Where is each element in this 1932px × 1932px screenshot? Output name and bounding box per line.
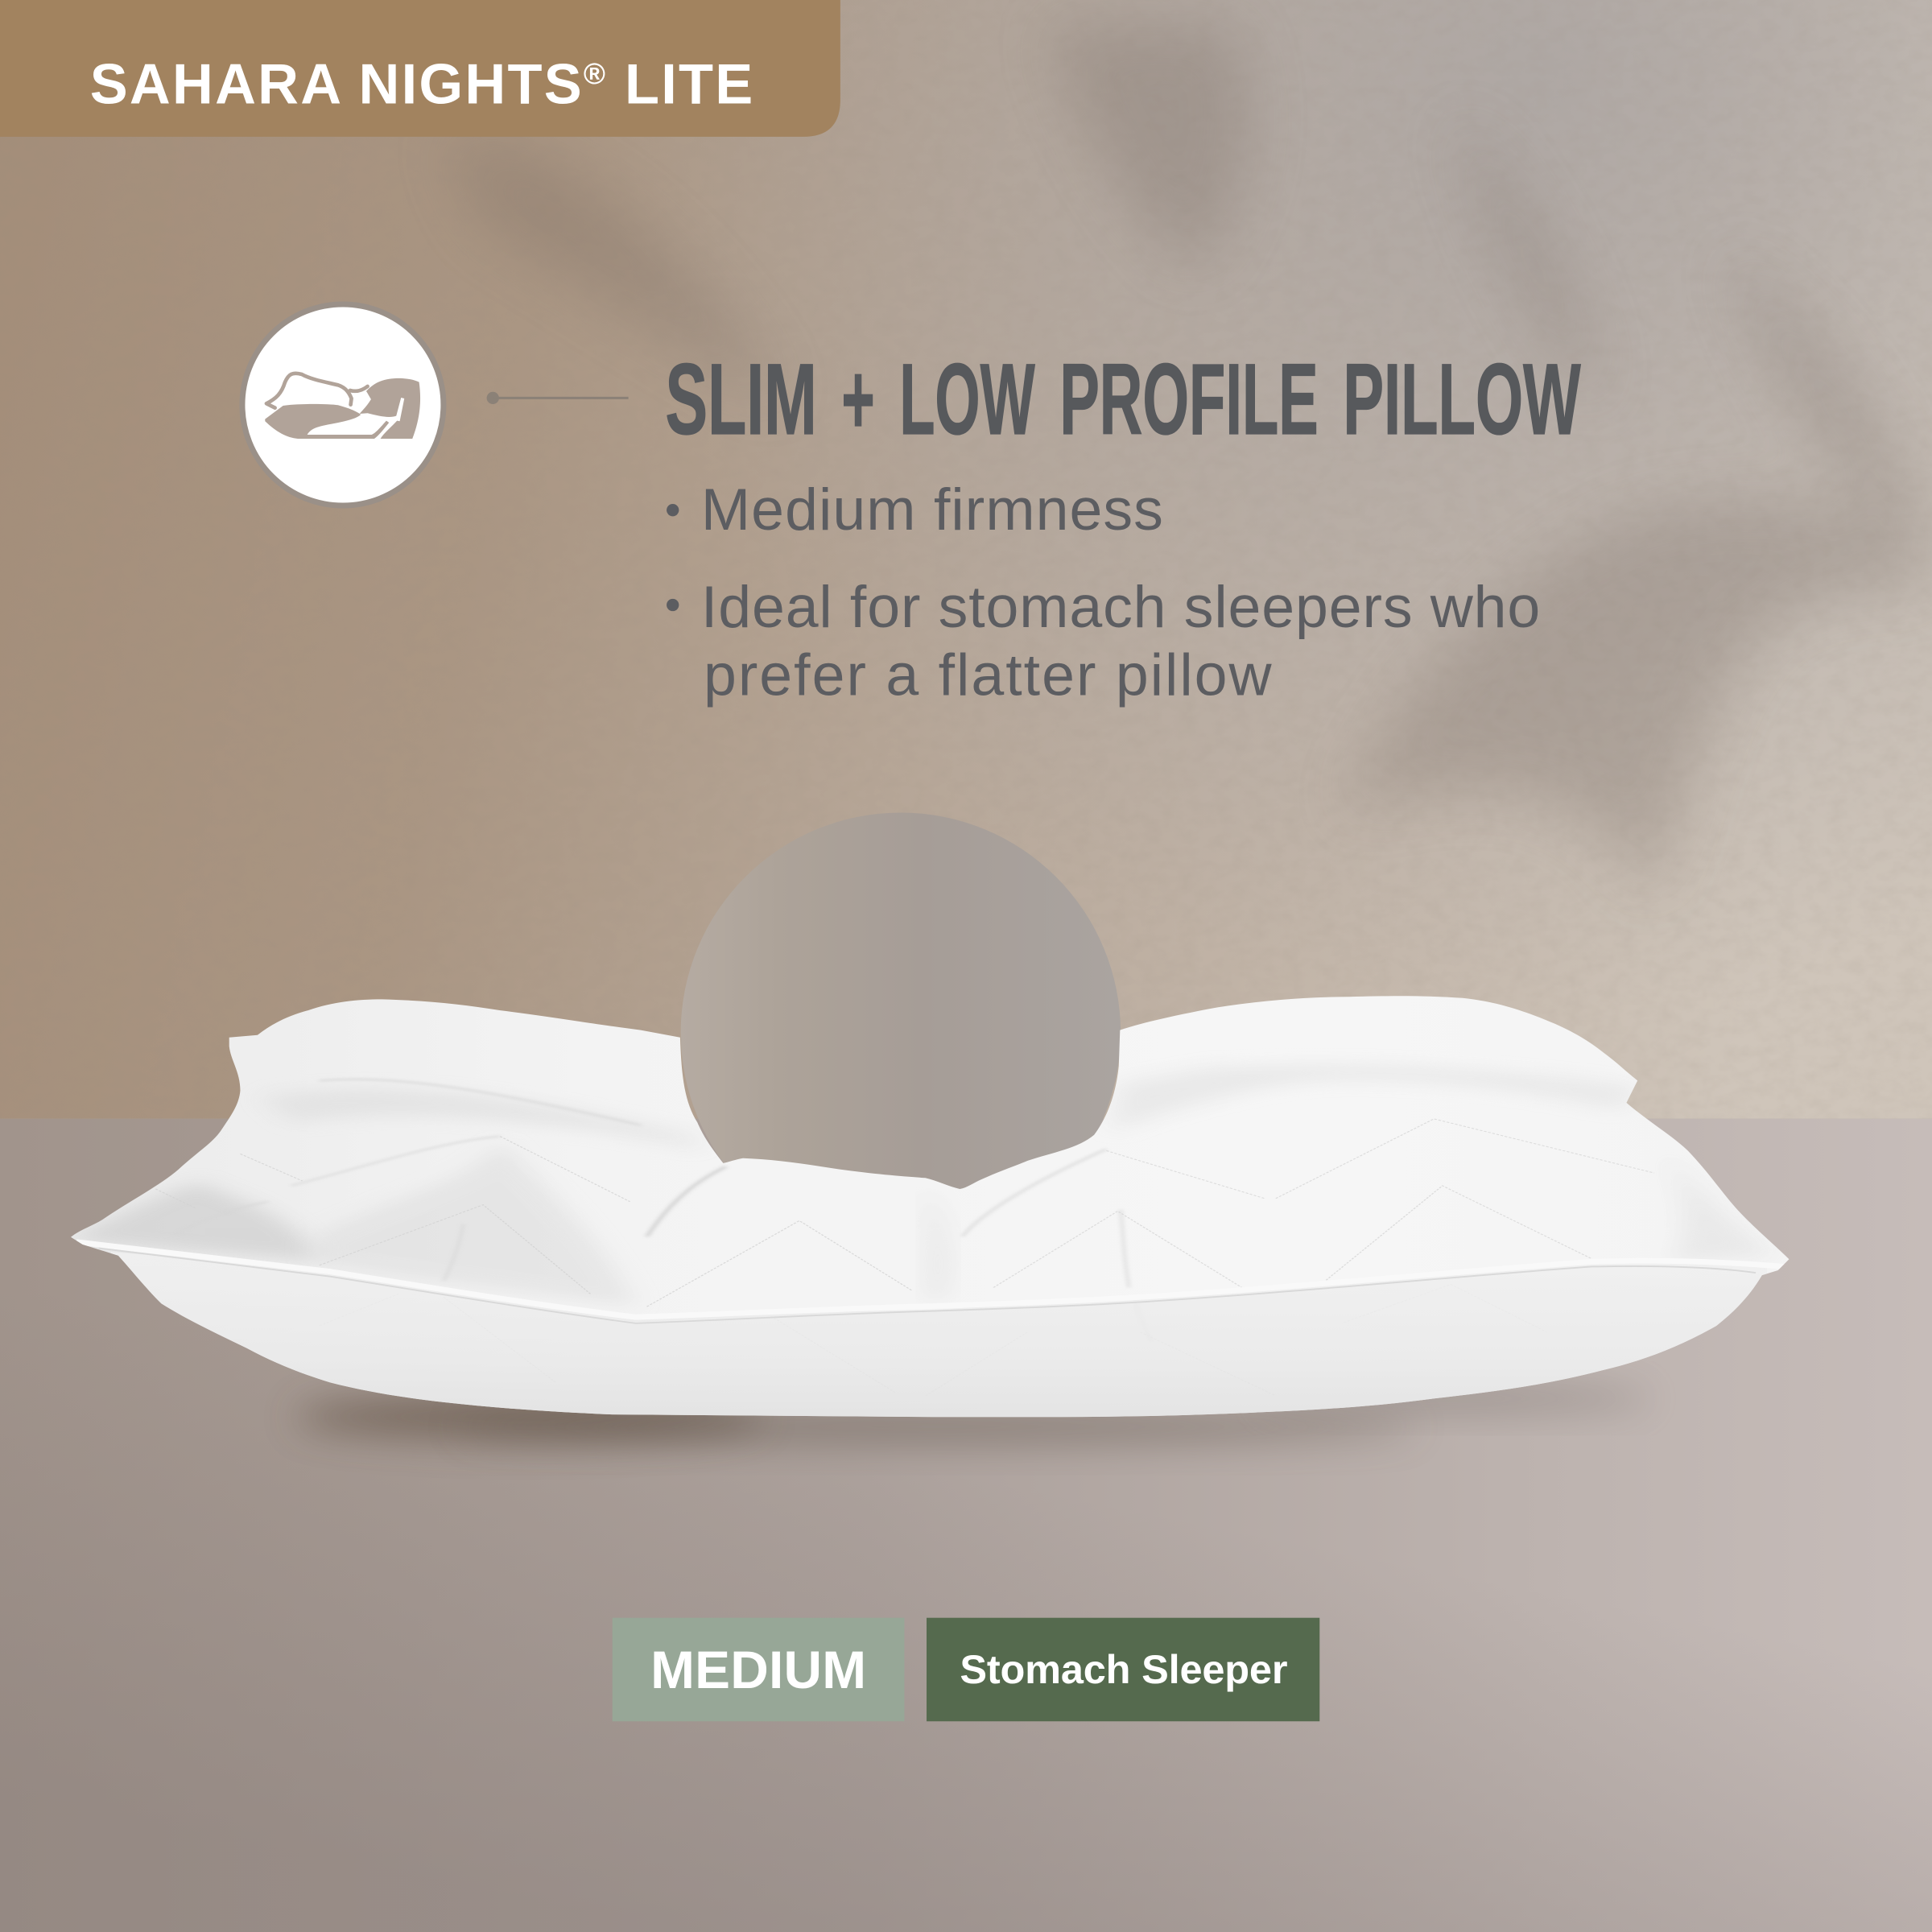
heading [666,342,1581,456]
heading: + [841,342,875,456]
pillow [71,996,1789,1430]
badge: firmness [613,1618,904,1721]
header tab [0,0,840,137]
left half creases and stitching [76,1080,912,1393]
icon: pillow profile badge [242,304,444,506]
heading: LOW [899,342,1035,456]
feature list: prefer a flatter pillow [704,641,1273,708]
pillow shadow on floor [295,1386,1651,1443]
heading: PROFILE [1059,342,1319,456]
seam piping [76,1242,1784,1317]
badge: sleeper type: Stomach Sleeper [960,1646,1287,1692]
right half creases and stitching [926,1065,1773,1396]
leaf shadows on wall [444,25,1922,899]
heading: PILLOW [1343,342,1581,456]
ball [681,812,1121,1253]
badge: sleeper type [927,1618,1319,1721]
brand title: SAHARA NIGHTS [90,52,582,116]
background wall [0,0,1932,1119]
badge: firmness: MEDIUM [650,1640,866,1699]
front side panel tint [111,1252,1767,1430]
feature list: Ideal for stomach sleepers who [701,573,1540,640]
feature list: Medium firmness [701,476,1163,543]
feature list [667,476,1540,708]
connector line [487,392,629,404]
brand title: LITE [607,52,753,116]
brand title: ® [584,57,605,90]
floor [0,1119,1932,1932]
heading: SLIM [666,342,817,456]
